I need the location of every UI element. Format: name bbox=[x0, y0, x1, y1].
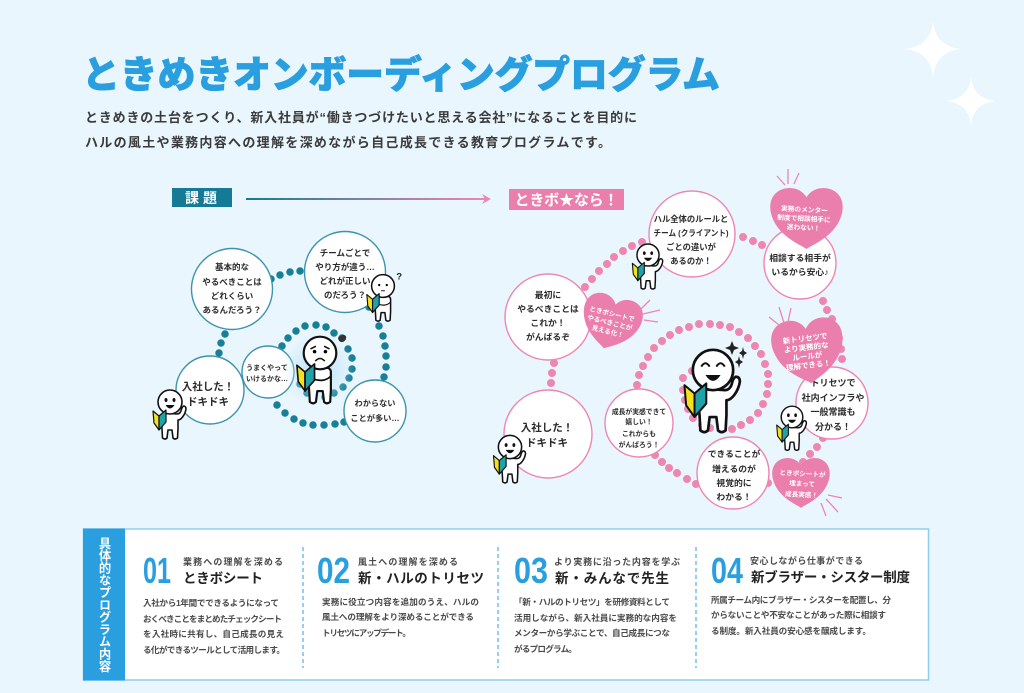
heart: ときボシートが: ときボシートが bbox=[779, 468, 826, 479]
icon: sparkles bbox=[905, 21, 995, 125]
bubble: 基本的な: 基本的な bbox=[215, 262, 249, 272]
heart: 実務のメンター: 制度で相談相手に bbox=[777, 213, 831, 224]
heart: ときボシートで bbox=[575, 289, 646, 356]
bubble: ハル全体: あるのか！ bbox=[670, 256, 712, 266]
item 04: 所属チーム内にブラザー・シスターを配置し、分 bbox=[711, 594, 891, 605]
item 01 bbox=[143, 550, 285, 655]
heart: 新トリセツで: より実務的な bbox=[783, 339, 830, 355]
bubble: うまくやって bbox=[242, 346, 294, 398]
bubble: わからない: ことが多い… bbox=[350, 413, 400, 423]
bubble: うまくやって: うまくやって bbox=[246, 363, 288, 372]
heart: 実務のメンター: 実務のメンター bbox=[781, 204, 828, 215]
figure: thinking newcomer bbox=[367, 271, 402, 321]
bubble: できることが: 視覚的に bbox=[716, 477, 752, 488]
bubble: できることが bbox=[697, 437, 769, 509]
figure: waving newcomer bbox=[153, 390, 186, 439]
heart: ときボシートが bbox=[772, 458, 830, 508]
bubble: チームごとで: やり方が違う… bbox=[315, 262, 375, 272]
bubble: トリセツで: 分かる！ bbox=[815, 421, 851, 432]
item 02: トリセツにアップデート。 bbox=[322, 627, 411, 638]
bubble: チームごとで: チームごとで bbox=[320, 248, 370, 258]
bubble: チームごとで: のだろう？ bbox=[324, 290, 366, 300]
heart: ときボシートで: やるべきことが bbox=[586, 313, 634, 333]
bubble: 最初に: やるべきことは bbox=[517, 304, 579, 314]
arrow bbox=[246, 194, 491, 204]
sparks around hearts bbox=[641, 169, 842, 516]
figure: happy newcomer bbox=[684, 341, 747, 432]
panel: tokibo diagram bbox=[494, 169, 868, 516]
heart: 実務のメンター: 迷わない！ bbox=[787, 222, 820, 233]
bubble: ハル全体: チーム (クライアント) bbox=[654, 228, 729, 238]
bubble: 成長が実感: 嬉しい！ bbox=[625, 417, 653, 426]
item 02 bbox=[317, 550, 484, 638]
bubble: トリセツで: 一般常識も bbox=[810, 406, 856, 417]
side label bbox=[83, 528, 125, 680]
dotted path: tokibo bbox=[551, 237, 842, 484]
bubble: 成長が実感: がんばろう！ bbox=[619, 440, 659, 449]
item 04: 安心しながら仕事ができる bbox=[750, 555, 863, 566]
heart: 実務のメンター bbox=[770, 188, 843, 249]
item 01: る化ができるツールとして活用します。 bbox=[143, 644, 285, 655]
bubble: チームごとで: どれが正しい bbox=[319, 276, 371, 286]
bubble: 入社した: ドキドキ bbox=[187, 396, 229, 408]
bubble: できることが: わかる！ bbox=[716, 492, 752, 502]
figure: thinking newcomer: ? bbox=[396, 271, 402, 282]
bubble: 成長が実感: 成長が実感できて bbox=[612, 407, 666, 416]
heart: 新トリセツで: ルールが bbox=[792, 349, 823, 363]
item 01: 業務への理解を深める bbox=[183, 556, 283, 567]
bubble: 最初に: がんばるぞ bbox=[526, 331, 570, 342]
bubble: できることが: 増えるのが bbox=[712, 463, 756, 474]
bubble: 基本的な bbox=[192, 248, 272, 330]
side label: 具体的なプログラム内容 bbox=[97, 537, 111, 673]
heart: 新トリセツで: 理解できる！ bbox=[785, 357, 831, 373]
heart: 新トリセツで bbox=[769, 315, 847, 387]
bubble: 入社した: 入社した！ bbox=[182, 380, 234, 393]
panel: issues diagram bbox=[153, 232, 406, 442]
item 04: 新ブラザー・シスター制度 bbox=[751, 569, 910, 585]
bubble: 最初に bbox=[505, 274, 591, 360]
item 04: 04 bbox=[711, 550, 743, 591]
bubble: 相談する相手: いるから安心♪ bbox=[771, 266, 829, 277]
item 02: 02 bbox=[317, 550, 350, 591]
bubble: 入社した bbox=[504, 390, 592, 478]
panel frame bbox=[84, 529, 928, 680]
item 03: メンターから学ぶことで、自己成長につな bbox=[514, 627, 670, 638]
heart: ときボシートが: 埋まって bbox=[789, 478, 815, 489]
panel: program contents bbox=[83, 528, 928, 680]
dividers bbox=[303, 547, 696, 668]
bubble: 相談する相手 bbox=[764, 227, 836, 299]
bubble: うまくやって: いけるかな… bbox=[246, 374, 288, 383]
title: ときめきオンボーディングプログラム bbox=[82, 54, 720, 97]
bubble: 相談する相手: 相談する相手が bbox=[769, 252, 831, 263]
item 03: 03 bbox=[514, 550, 548, 591]
badge: 課題: 課題 bbox=[185, 190, 221, 206]
bubble: トリセツで: 社内インフラや bbox=[802, 392, 864, 403]
bubble: 基本的な: やるべきことは bbox=[202, 277, 262, 287]
item 04 bbox=[711, 550, 910, 636]
figure: newcomer at top bbox=[632, 244, 663, 289]
intro text: ハルの風土や業務内容への理解を深めながら自己成長できる教育プログラムです。 bbox=[85, 135, 611, 150]
heart: ときボシートで: ときボシートで bbox=[589, 304, 636, 324]
intro text: ときめきの土台をつくり、新入社員が“働きつづけたいと思える会社”になることを目的に bbox=[85, 110, 637, 125]
heart: 新トリセツで: 新トリセツで bbox=[782, 330, 828, 346]
figure: worried newcomer bbox=[282, 334, 354, 406]
bubble: トリセツで: トリセツで bbox=[810, 378, 856, 388]
item 01: 01 bbox=[143, 550, 171, 591]
item 01: を入社時に共有し、自己成長の見え bbox=[143, 628, 284, 639]
bubble: 入社した: 入社した！ bbox=[521, 421, 573, 434]
intro text bbox=[85, 110, 637, 150]
figure: newcomer at right bbox=[777, 406, 806, 450]
bubble: チームごとで bbox=[304, 232, 386, 312]
item 03: 活用しながら、新入社員に実務的な内容を bbox=[514, 612, 677, 623]
bubble: わからない bbox=[344, 380, 406, 442]
bubble: 基本的な: あるんだろう？ bbox=[202, 305, 262, 315]
item 02: 風土への理解を深める bbox=[358, 556, 458, 567]
item 03 bbox=[514, 550, 680, 654]
bubble: 最初に: これか！ bbox=[530, 318, 566, 328]
bubble: 成長が実感: これからも bbox=[622, 430, 656, 438]
bubble: ハル全体: ごとの違いが bbox=[666, 242, 717, 252]
bubble: 入社した: ドキドキ bbox=[526, 437, 568, 449]
badge: ときボ★なら！: ときボ★なら！ bbox=[514, 192, 618, 209]
item 02: 風土への理解をより深めることができる bbox=[322, 611, 474, 622]
bubble: 成長が実感 bbox=[605, 389, 673, 457]
dotted path: issues bbox=[219, 271, 386, 425]
bubble: 入社した bbox=[176, 356, 244, 424]
item 04: からないことや不安なことがあった際に相談す bbox=[711, 609, 886, 620]
item 03: 「新・ハルのトリセツ」を研修資料として bbox=[514, 596, 670, 607]
badge: 課題 bbox=[172, 188, 232, 207]
item 01: 入社から1年間でできるようになって bbox=[143, 597, 279, 608]
item 02: 新・ハルのトリセツ bbox=[358, 571, 484, 586]
bubble: ハル全体 bbox=[649, 191, 735, 277]
item 03: がるプログラム。 bbox=[514, 643, 577, 654]
bubble: ハル全体: ハル全体のルールと bbox=[654, 214, 728, 224]
item 04: る制度。新入社員の安心感を醸成します。 bbox=[711, 625, 871, 636]
heart: ときボシートで: 見える化！ bbox=[591, 323, 625, 340]
bubble: できることが: できることが bbox=[708, 448, 761, 459]
bubble: トリセツで bbox=[796, 367, 868, 439]
item 01: ときボシート bbox=[183, 571, 263, 586]
item 02: 実務に役立つ内容を追加のうえ、ハルの bbox=[322, 596, 479, 607]
bubble: わからない: わからない bbox=[355, 399, 395, 408]
heart: ときボシートが: 成長実感！ bbox=[785, 489, 818, 500]
item 03: より実務に沿った内容を学ぶ bbox=[554, 556, 680, 567]
bubble: 最初に: 最初に bbox=[535, 289, 561, 300]
item 01: おくべきことをまとめたチェックシート bbox=[143, 614, 282, 624]
item 03: 新・みんなで先生 bbox=[555, 570, 669, 586]
bubble: 基本的な: どれくらい bbox=[211, 291, 253, 301]
figure: newcomer at start bbox=[494, 435, 526, 483]
